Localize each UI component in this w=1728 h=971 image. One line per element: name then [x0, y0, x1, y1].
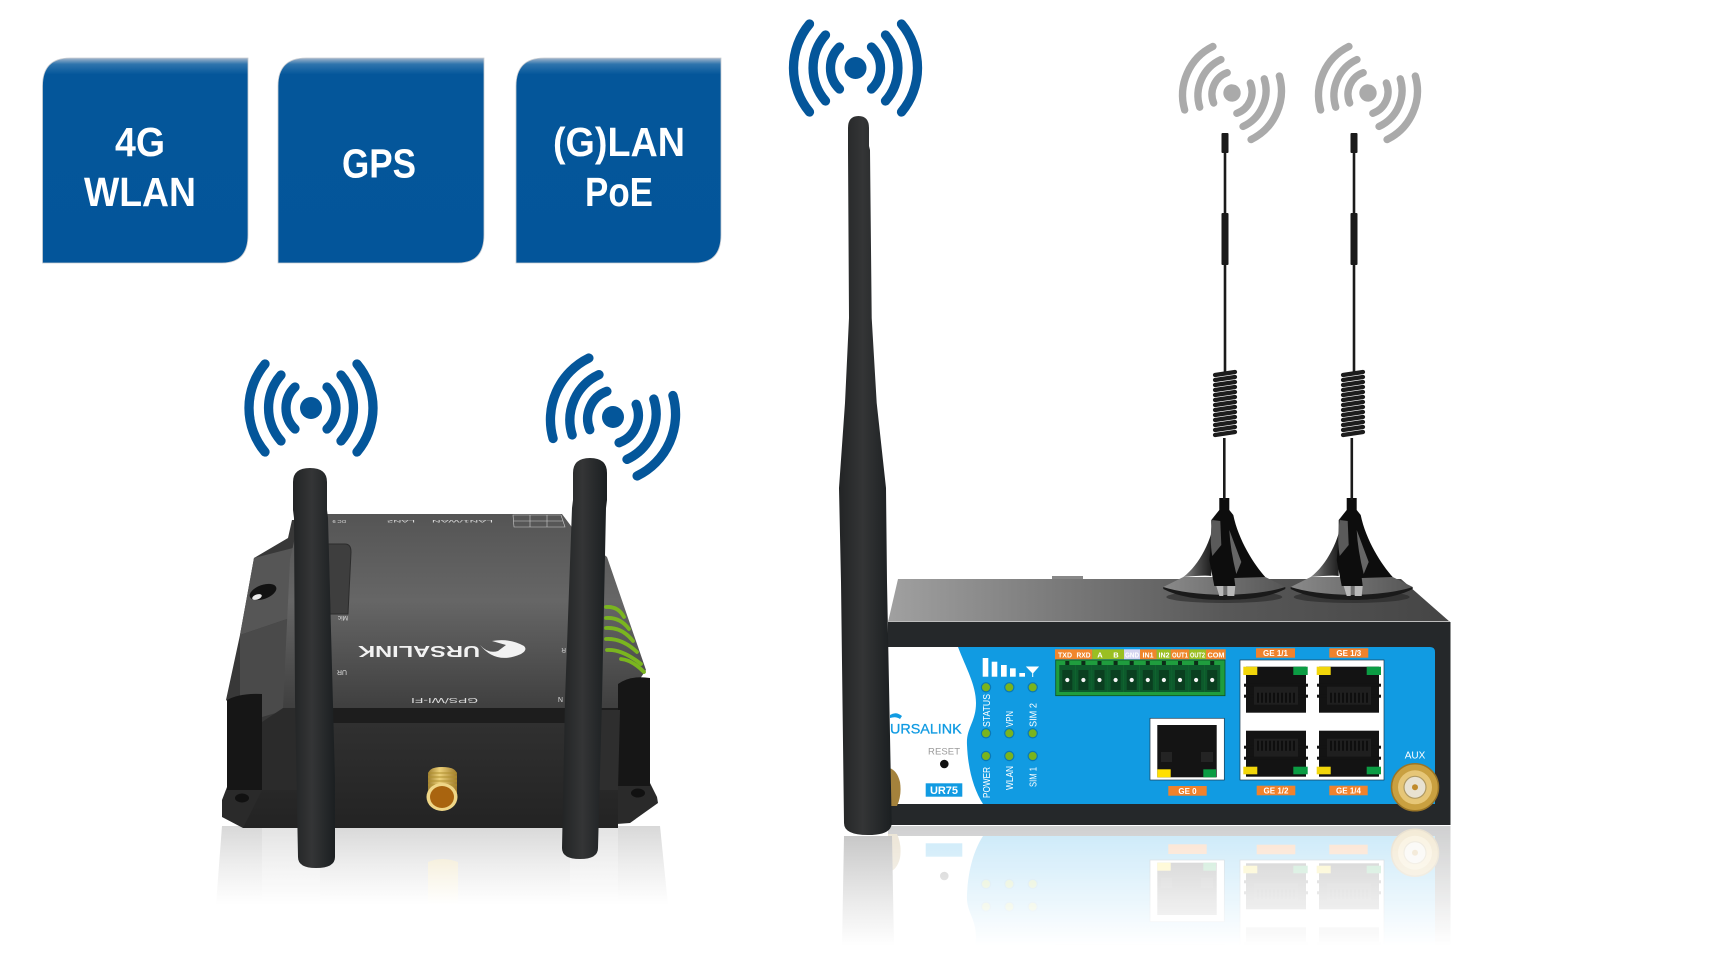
left router: right antenna: [562, 458, 607, 859]
status LEDs: [606, 607, 644, 672]
logo: [890, 713, 962, 736]
top surface labels: N: [558, 695, 563, 702]
top surface labels: DC 9: [332, 518, 346, 523]
icon: blue tilted signal waves above left router right antenna: [538, 352, 688, 482]
icon: grey tilted signal waves, second magnetic antenna: [1309, 41, 1427, 145]
terminal labels: RXD: [1076, 650, 1091, 659]
reset and model: RESET: [928, 746, 960, 757]
vertical LED labels: STATUS: [982, 694, 993, 727]
top surface: [283, 514, 646, 708]
vertical LED labels: [982, 694, 1040, 798]
right router: magnetic antenna 2: [1291, 133, 1413, 603]
top surface labels: LAN1/WAN: [432, 519, 493, 523]
top surface labels: Mic: [337, 614, 348, 621]
top surface labels: [332, 518, 581, 703]
badge: 4G WLAN: [42, 58, 248, 263]
vertical LED labels: VPN: [1005, 711, 1016, 727]
badge: 4G WLAN: 4G: [115, 119, 165, 165]
icon: blue signal waves above left router left antenna: [249, 364, 373, 452]
top surface labels: LAN2: [387, 519, 415, 523]
icon: grey tilted signal waves, first magnetic antenna: [1173, 41, 1291, 145]
terminal table: [513, 515, 565, 527]
vertical LED labels: SIM 2: [1028, 703, 1040, 727]
right router: reflection: [888, 826, 1450, 926]
terminal labels: IN2: [1158, 650, 1170, 659]
right router: antenna reflection: [842, 836, 894, 946]
terminal labels: TXD: [1058, 650, 1073, 659]
badge: (G)LAN PoE: PoE: [585, 169, 653, 215]
badge: GPS: GPS: [342, 140, 416, 186]
logo: [357, 640, 525, 659]
left router: reflection on floor: [216, 826, 668, 905]
top surface labels: SIM: [569, 634, 581, 641]
terminal labels: A: [1097, 650, 1103, 659]
terminal labels: OUT2: [1190, 650, 1205, 659]
top surface labels: UR: [337, 668, 347, 675]
logo: URSALINK: [357, 642, 480, 659]
vertical LED labels: SIM 1: [1028, 767, 1040, 787]
mounting flanges: [222, 783, 658, 828]
terminal labels: OUT1: [1172, 650, 1188, 659]
port labels: [1178, 649, 1362, 796]
top surface labels: R: [561, 646, 566, 653]
badge: 4G WLAN: WLAN: [84, 169, 196, 215]
terminal labels: IN1: [1142, 650, 1154, 659]
right router: front panel: UR75: [930, 785, 958, 797]
AUX label: AUX: [1405, 750, 1426, 761]
left router: body: [222, 514, 658, 828]
port labels: GE 1/2: [1264, 786, 1289, 795]
right router: top plate: [888, 576, 1450, 622]
left side wing: [226, 520, 300, 730]
left bracket: [227, 694, 262, 790]
port labels: GE 1/1: [1263, 649, 1288, 658]
gold antenna connector: [426, 767, 458, 811]
port labels: GE 1/3: [1336, 649, 1362, 658]
terminal labels: GND: [1125, 650, 1139, 659]
left router: left antenna: [293, 468, 335, 868]
badge: GPS: [278, 58, 484, 263]
vertical LED labels: POWER: [982, 767, 993, 798]
terminal labels: B: [1113, 650, 1119, 659]
terminal labels: COM: [1208, 650, 1224, 659]
top surface labels: GPS/WI-FI: [411, 696, 478, 703]
icon: blue signal waves above right router antenna: [794, 24, 918, 112]
icon: signal antenna: [1027, 667, 1038, 677]
vertical LED labels: WLAN: [1005, 766, 1016, 790]
right bracket: [618, 677, 650, 786]
terminal labels: [1058, 650, 1224, 659]
right router: front panel: [888, 622, 1450, 825]
port labels: GE 0: [1178, 787, 1197, 796]
right router: main antenna: [839, 116, 892, 835]
right router: magnetic antenna 1: [1163, 133, 1285, 603]
badge: (G)LAN PoE: [516, 58, 721, 263]
logo: URSALINK: [890, 720, 962, 736]
port labels: GE 1/4: [1336, 786, 1362, 795]
front face: [243, 723, 618, 828]
badge: (G)LAN PoE: (G)LAN: [553, 119, 685, 165]
